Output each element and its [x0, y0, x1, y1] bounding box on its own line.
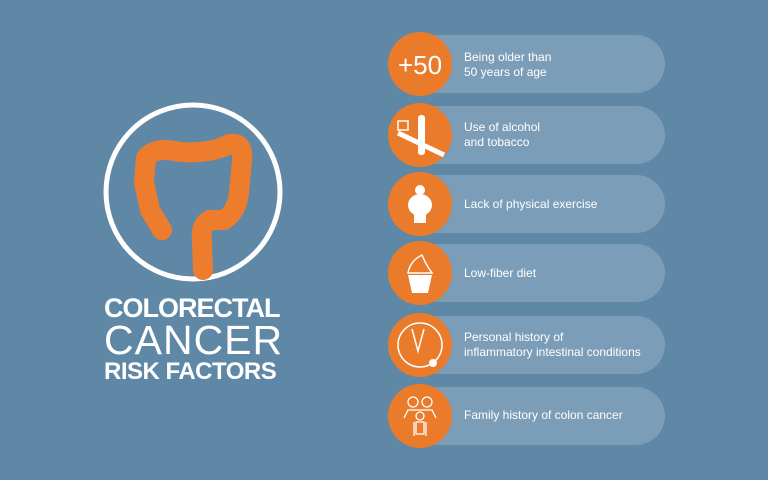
logo: colon in circle: [104, 102, 282, 282]
title: [104, 293, 283, 385]
row 5: [388, 313, 665, 377]
row 1: +50: [398, 50, 442, 80]
row 1: 50 years of age: [464, 65, 547, 79]
row 3: Lack of physical exercise: [464, 197, 597, 211]
title: RISK FACTORS: [104, 358, 276, 385]
row 2: Use of alcohol: [464, 120, 540, 134]
row 5: inflammatory intestinal conditions: [464, 345, 641, 359]
row 4: Low-fiber diet: [464, 266, 536, 280]
row 1: Being older than: [464, 50, 551, 64]
row 2: [388, 103, 665, 167]
title: COLORECTAL: [104, 293, 279, 323]
row 5: Personal history of: [464, 330, 563, 344]
title: CANCER: [104, 317, 283, 363]
row 2: and tobacco: [464, 135, 529, 149]
row 6: Family history of colon cancer: [464, 408, 623, 422]
row 3: [388, 172, 665, 236]
row 4: [388, 241, 665, 305]
row 1: [388, 32, 665, 96]
